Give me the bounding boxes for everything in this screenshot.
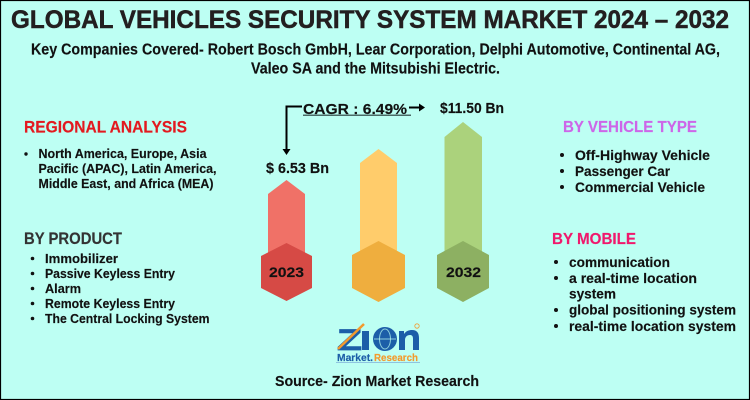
- panel: by product: Immobilizer: [45, 251, 118, 266]
- panel: by mobile: a real-time location: [569, 270, 697, 286]
- arrow: right to 2032: [409, 104, 425, 112]
- panel: by vehicle type: Off-Highway Vehicle: [575, 147, 710, 163]
- panel: by mobile: BY MOBILE: [552, 231, 636, 248]
- panel: by vehicle type: Commercial Vehicle: [575, 179, 705, 195]
- bar: 2032: 2032: [446, 264, 481, 280]
- arrow: down to 2023: [282, 106, 302, 155]
- panel: by vehicle type: Passenger Car: [575, 163, 671, 179]
- panel: by mobile: global positioning system: [569, 302, 736, 318]
- logo: Zion Market Research: Z: [337, 324, 362, 357]
- panel: by product: The Central Locking System: [45, 311, 210, 326]
- panel: by vehicle type: [560, 119, 710, 195]
- value label: 2032: $11.50 Bn: [440, 100, 504, 117]
- subtitle: key companies: [31, 42, 720, 78]
- panel: by vehicle type: BY VEHICLE TYPE: [563, 119, 697, 136]
- panel: by product: Remote Keyless Entry: [45, 296, 176, 311]
- panel: by product: Alarm: [45, 281, 81, 296]
- panel: by product: Passive Keyless Entry: [45, 266, 176, 281]
- panel: regional analysis: Pacific (APAC), Latin America,: [38, 161, 216, 176]
- panel: regional analysis: REGIONAL ANALYSIS: [24, 118, 187, 136]
- panel: regional analysis: North America, Europe, Asia: [38, 146, 207, 161]
- bar: middle: [352, 149, 405, 302]
- panel: by mobile: communication: [569, 254, 670, 270]
- panel: by product: [24, 230, 210, 326]
- panel: regional analysis: Middle East, and Africa (MEA): [38, 176, 214, 191]
- bar: 2032: [437, 122, 489, 302]
- bar: 2023: 2023: [269, 264, 304, 280]
- title: GLOBAL VEHICLES SECURITY SYSTEM MARKET 2024 – 2032: [11, 6, 729, 34]
- panel: regional analysis: [24, 118, 216, 191]
- logo: Zion Market Research: Research: [374, 352, 418, 364]
- panel: by mobile: real-time location system: [569, 318, 736, 334]
- subtitle: key companies: Valeo SA and the Mitsubishi Electric.: [251, 60, 500, 78]
- panel: by mobile: [552, 231, 736, 334]
- panel: by mobile: system: [569, 286, 616, 302]
- logo: Zion Market Research: [336, 324, 420, 364]
- value label: 2023: $ 6.53 Bn: [266, 160, 329, 177]
- CAGR label: CAGR : 6.49%: [303, 101, 407, 118]
- source: Source- Zion Market Research: [275, 374, 479, 390]
- bar: 2023: [261, 180, 312, 301]
- logo: Zion Market Research: Market.: [337, 352, 373, 364]
- panel: by product: BY PRODUCT: [24, 230, 122, 248]
